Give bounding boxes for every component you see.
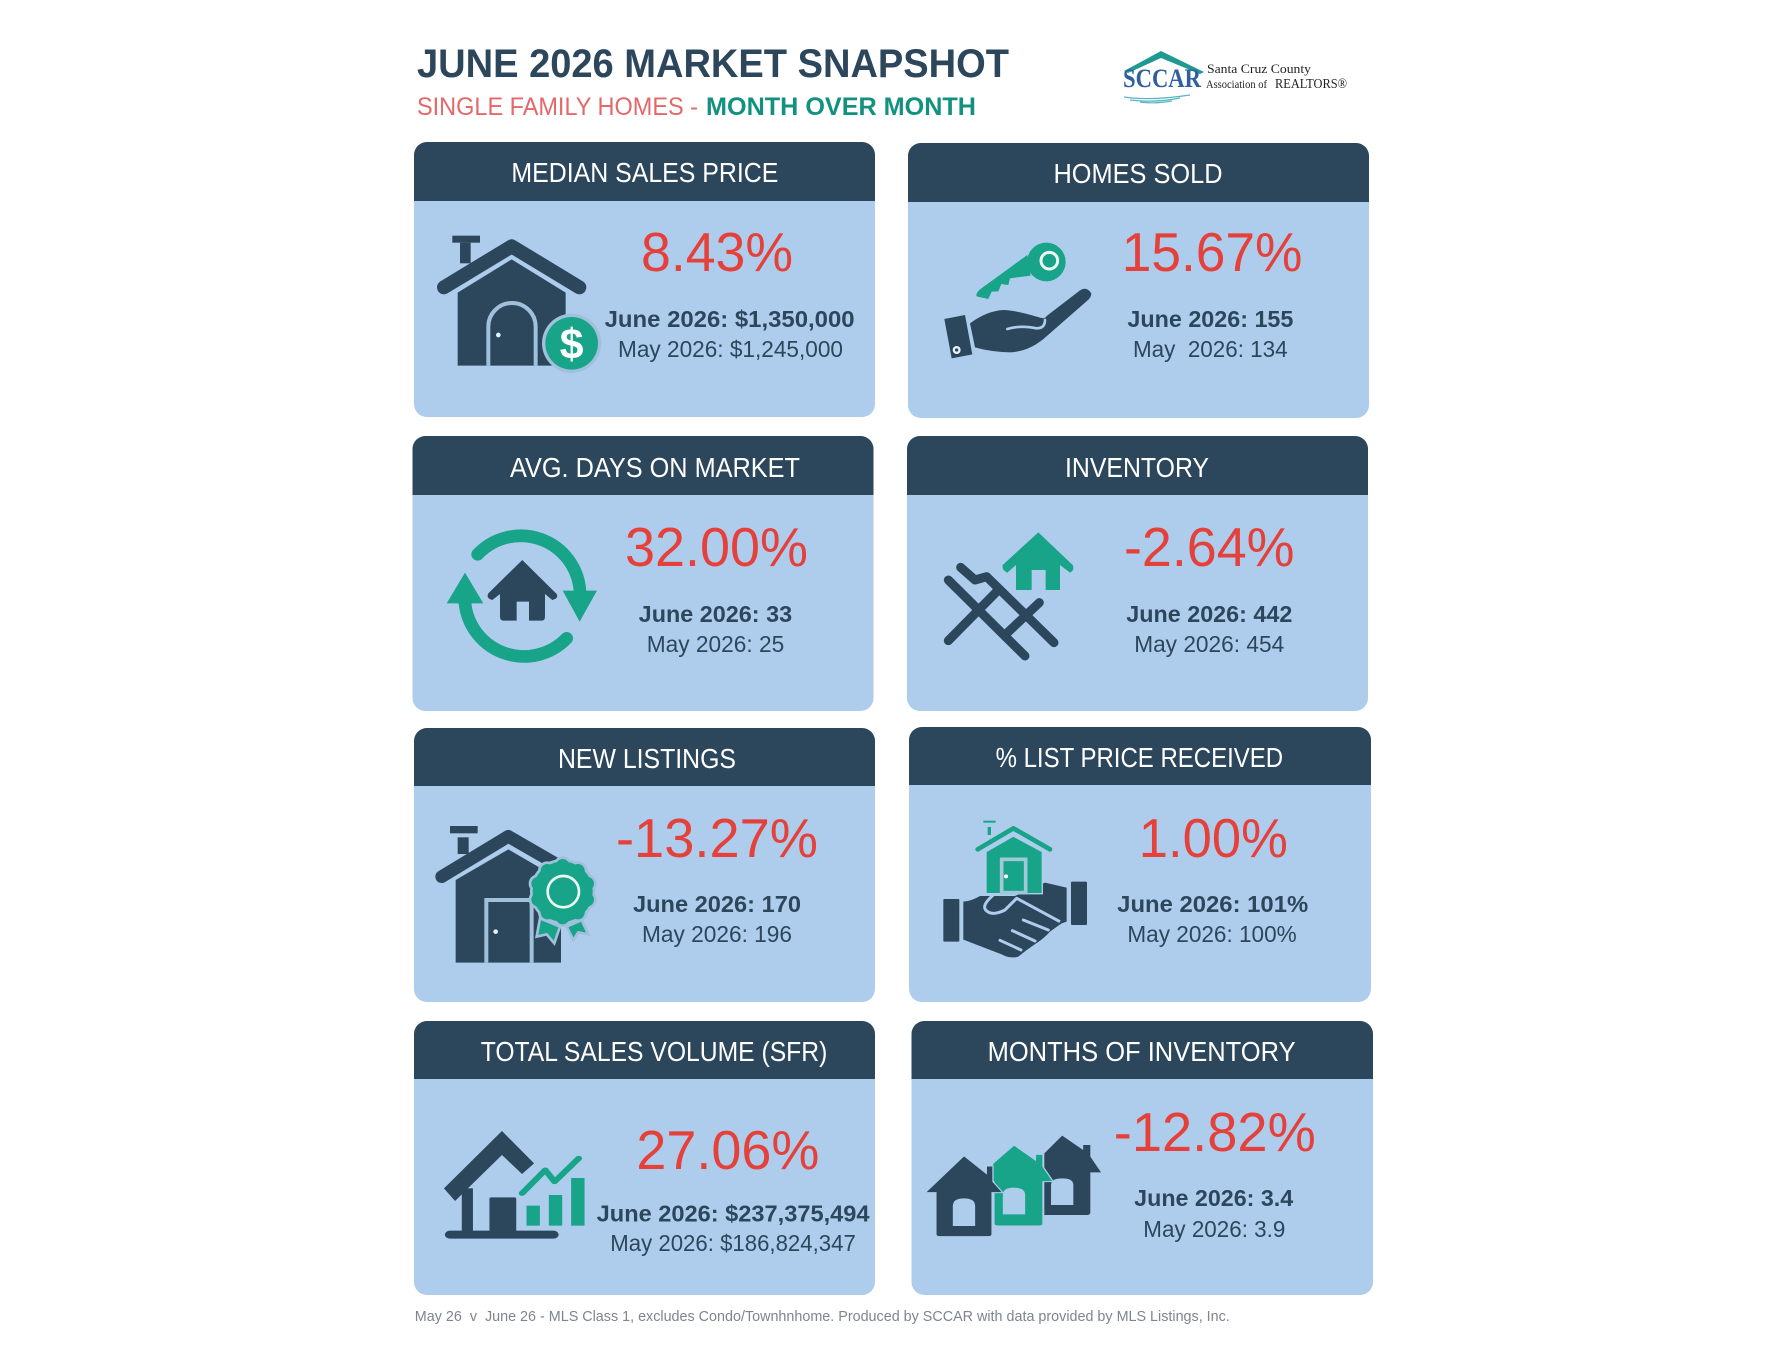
panel: inventory (907, 436, 1368, 711)
panel: total sales volume: 27.06% (636, 1119, 819, 1181)
panel: months of inventory (912, 1021, 1373, 1295)
icon: recycling arrows around house (447, 536, 597, 656)
panel: total sales volume: June 2026: $237,375,494 (597, 1200, 870, 1226)
panel: total sales volume: May 2026: $186,824,347 (610, 1230, 856, 1256)
logo: SCCAR: Association of (1206, 79, 1267, 91)
panel: homes sold: May 2026: 134 (1133, 336, 1288, 362)
panel: months of inventory: June 2026: 3.4 (1134, 1185, 1293, 1211)
panel: avg days on market: AVG. DAYS ON MARKET (510, 452, 800, 483)
icon: house with bar chart (444, 1131, 585, 1239)
logo: SCCAR: Santa Cruz County (1207, 61, 1312, 76)
panel: total sales volume: TOTAL SALES VOLUME (SFR) (481, 1036, 827, 1067)
panel: homes sold: HOMES SOLD (1054, 158, 1222, 189)
panel: avg days on market: 32.00% (625, 516, 808, 578)
panel: homes sold: 15.67% (1122, 221, 1302, 283)
panel: inventory: -2.64% (1124, 516, 1294, 578)
panel: median sales price (414, 142, 875, 417)
subtitle: MONTH OVER MONTH (706, 93, 976, 121)
icon: hand and key (944, 243, 1091, 358)
panel: inventory: June 2026: 442 (1126, 601, 1292, 627)
icon: house with dollar coin: $ (560, 320, 584, 368)
icon: handshake with house (943, 821, 1087, 957)
panel: median sales price: 8.43% (641, 221, 793, 283)
panel: median sales price: June 2026: $1,350,000 (605, 306, 855, 332)
icon: house with ribbon (442, 826, 594, 963)
panel: list price received: % LIST PRICE RECEIVED (996, 742, 1283, 773)
icon: ladder and house (948, 532, 1073, 656)
panel: median sales price: May 2026: $1,245,000 (618, 336, 843, 362)
panel: list price received: May 2026: 100% (1127, 921, 1297, 947)
panel: inventory: May 2026: 454 (1134, 631, 1284, 657)
icon: three houses (925, 1136, 1101, 1237)
panel: new listings: May 2026: 196 (642, 921, 792, 947)
logo: SCCAR (1123, 51, 1347, 103)
panel: list price received: 1.00% (1139, 807, 1288, 869)
panel: inventory: INVENTORY (1065, 452, 1209, 483)
panel: avg days on market (412, 436, 874, 711)
subtitle (417, 93, 976, 121)
panel: months of inventory: May 2026: 3.9 (1143, 1216, 1285, 1242)
icon: house with dollar coin (444, 236, 601, 373)
panel: new listings: NEW LISTINGS (558, 743, 736, 774)
footer note: May 26 v June 26 - MLS Class 1, excludes Condo/Townhnhome. Produced by SCCAR with data provided by MLS Listings, Inc. (415, 1308, 1230, 1325)
panel: months of inventory: -12.82% (1114, 1101, 1316, 1163)
panel: avg days on market: May 2026: 25 (647, 631, 784, 657)
title: JUNE 2026 MARKET SNAPSHOT (417, 42, 1009, 86)
panel: homes sold: June 2026: 155 (1127, 306, 1294, 332)
panel: avg days on market: June 2026: 33 (639, 601, 792, 627)
logo: SCCAR: SCCAR (1123, 64, 1201, 93)
panel: new listings (414, 728, 875, 1002)
panel: new listings: -13.27% (616, 807, 818, 869)
panel: list price received (909, 727, 1371, 1002)
panel: homes sold (908, 143, 1369, 418)
logo: SCCAR: REALTORS® (1275, 77, 1347, 92)
subtitle: SINGLE FAMILY HOMES - (417, 93, 698, 121)
panel: median sales price: MEDIAN SALES PRICE (511, 157, 778, 188)
panel: new listings: June 2026: 170 (633, 891, 801, 917)
panel: months of inventory: MONTHS OF INVENTORY (988, 1036, 1296, 1067)
panel: total sales volume (414, 1021, 875, 1295)
panel: list price received: June 2026: 101% (1117, 891, 1308, 917)
